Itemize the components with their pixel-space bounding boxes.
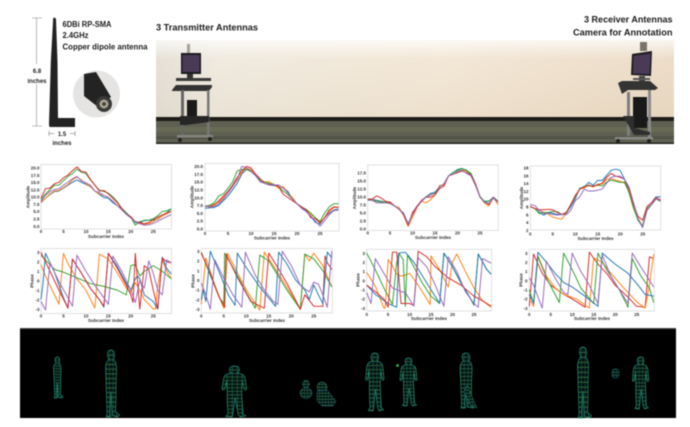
receiver cart — [615, 42, 658, 143]
chart: amplitude 3: Amplitude — [352, 186, 357, 209]
chart: amplitude 2: 2.5 — [197, 219, 203, 224]
chart: phase 2 — [190, 248, 332, 323]
icon: dipole antenna — [49, 18, 75, 127]
chart: amplitude 3: 0 — [366, 230, 369, 236]
chart: amplitude 4: 5 — [552, 232, 555, 236]
chart: amplitude 1: 15 — [106, 229, 111, 234]
chart: amplitude 2: Subcarrier Index — [254, 236, 291, 240]
chart: phase 1 — [30, 248, 172, 323]
chart: phase 4: 10 — [570, 312, 575, 317]
chart: amplitude 1: Amplitude — [26, 185, 30, 208]
chart: phase 2: 2 — [197, 259, 200, 264]
chart: phase 3: -1 — [361, 288, 365, 292]
chart: amplitude 2: 20 — [294, 231, 300, 236]
chart: phase 3: 25 — [471, 312, 477, 317]
chart: amplitude 4: 10 — [573, 232, 578, 236]
chart: phase 1: -3 — [35, 307, 40, 312]
chart: amplitude 2: 10 — [248, 231, 254, 236]
chart: phase 2: 20 — [289, 314, 294, 318]
chart: phase 1: 3 — [37, 250, 40, 255]
chart: amplitude 3: 7.5 — [360, 202, 366, 207]
chart: phase 1: Subcarrier Index — [88, 318, 125, 323]
photo: room with transmitter and receiver carts — [156, 40, 674, 144]
chart: amplitude 4: 12 — [523, 189, 529, 194]
chart: amplitude 4: 15 — [595, 232, 601, 236]
figure 10 — [632, 357, 649, 409]
chart: phase 3: Phase — [356, 273, 360, 287]
chart: amplitude 2: 17.5 — [194, 172, 203, 177]
chart: phase 1: 2 — [37, 260, 40, 264]
chart: phase 3: -2 — [361, 297, 365, 302]
width dimension: 1.5 — [58, 132, 67, 138]
chart: amplitude 1: 0 — [40, 229, 43, 234]
chart: phase 1: 10 — [83, 314, 89, 318]
chart: amplitude 3: 12.5 — [357, 186, 366, 192]
chart: amplitude 2: 20.0 — [194, 164, 203, 169]
chart: amplitude 1: 10.0 — [31, 195, 40, 200]
width dimension: inches — [52, 141, 72, 147]
chart: phase 4: 20 — [613, 312, 618, 317]
chart: amplitude 1: 2.5 — [33, 216, 40, 222]
chart: phase 3: 5 — [387, 312, 390, 317]
chart: amplitude 3: 2.5 — [360, 218, 366, 223]
chart: amplitude 3: 20 — [455, 230, 460, 236]
antenna specification text — [62, 20, 148, 52]
chart: phase 4: -3 — [523, 306, 528, 311]
chart: phase 3 — [356, 249, 492, 321]
antenna specification text: Copper dipole antenna — [62, 42, 148, 52]
chart: amplitude 3: 15 — [432, 230, 438, 236]
chart: amplitude 4 — [519, 166, 661, 241]
chart: phase 3: 15 — [428, 312, 434, 317]
figure 7 — [400, 358, 417, 406]
chart: phase 1: Phase — [30, 274, 34, 288]
chart: phase 3: Subcarrier Index — [411, 316, 448, 321]
transmitter cart — [172, 44, 213, 142]
chart: amplitude 3: 0.0 — [360, 226, 366, 231]
chart: phase 4: -2 — [523, 297, 528, 302]
chart: amplitude 3: Subcarrier Index — [415, 235, 452, 240]
chart: phase 4: 0 — [525, 278, 528, 283]
chart: phase 2: 3 — [197, 249, 200, 254]
chart: amplitude 1: 20.0 — [31, 166, 40, 170]
chart: phase 2: 0 — [197, 278, 200, 283]
chart: amplitude 2 — [190, 164, 339, 240]
chart: phase 2: Subcarrier Index — [249, 318, 286, 323]
chart: phase 1: 0 — [40, 314, 43, 318]
chart: phase 1: 1 — [37, 269, 40, 274]
chart: phase 4: 5 — [549, 312, 552, 317]
figure 5: crouching person — [317, 382, 336, 406]
chart: amplitude 4: 18 — [523, 166, 529, 170]
chart: amplitude 4: 25 — [640, 232, 646, 236]
chart: amplitude 3: 10 — [410, 230, 415, 236]
chart: amplitude 1: 20 — [128, 229, 134, 234]
chart: amplitude 4: 20 — [618, 232, 623, 236]
chart: amplitude 4: 6 — [526, 212, 529, 217]
chart: amplitude 2: 12.5 — [194, 188, 203, 192]
chart: phase 3: 3 — [362, 251, 365, 256]
chart: phase 2: 10 — [244, 314, 249, 318]
chart: phase 1: 25 — [151, 314, 156, 318]
chart: phase 1: -2 — [35, 297, 40, 302]
chart: amplitude 1: Subcarrier Index — [88, 234, 125, 239]
chart: phase 4: Phase — [518, 273, 524, 287]
chart: amplitude 2: 15.0 — [194, 180, 203, 185]
chart: phase 2: 25 — [311, 314, 317, 318]
chart: amplitude 2: 0.0 — [197, 226, 203, 232]
heading: receiver and camera: 3 Receiver Antennas — [584, 14, 672, 26]
chart: phase 1: -1 — [35, 288, 40, 293]
chart: phase 3: 2 — [362, 260, 365, 265]
chart: phase 3: 20 — [450, 312, 455, 317]
chart: amplitude 3: 25 — [477, 230, 483, 236]
ball 2 — [612, 369, 619, 378]
chart: phase 2: -1 — [195, 288, 200, 293]
figure 3 — [222, 366, 247, 417]
chart: amplitude 1: 7.5 — [33, 202, 40, 207]
chart: phase 2: 5 — [223, 314, 226, 318]
chart: phase 4: Subcarrier Index — [574, 316, 611, 321]
chart: amplitude 3: 5.0 — [360, 210, 366, 215]
chart: phase 1: 20 — [128, 314, 134, 318]
icon: connector close-up — [73, 70, 120, 118]
chart: amplitude 4: 16 — [523, 173, 529, 178]
chart: amplitude 4: 0 — [529, 232, 532, 236]
heading: receiver and camera — [573, 14, 673, 38]
chart: phase 1: 5 — [62, 314, 65, 318]
chart: amplitude 2: 0 — [204, 231, 207, 236]
ball 1 — [396, 364, 399, 367]
chart: amplitude 4: 10 — [523, 197, 529, 202]
chart: amplitude 4: 2 — [526, 228, 529, 233]
chart: amplitude 1: 17.5 — [31, 173, 40, 178]
chart: phase 4: 25 — [634, 312, 640, 317]
chart: amplitude 1 — [26, 164, 172, 239]
chart: amplitude 1: 5 — [62, 229, 65, 234]
chart: phase 2: -2 — [195, 297, 200, 302]
chart: phase 2: 0 — [200, 314, 203, 318]
figure 4: crouching person — [300, 380, 312, 398]
chart: phase 4: 1 — [525, 269, 528, 274]
chart: phase 1: 0 — [37, 278, 40, 284]
chart: phase 2: Phase — [190, 274, 196, 288]
chart: phase 4: 0 — [528, 312, 531, 317]
chart: amplitude 4: Subcarrier Index — [577, 236, 614, 241]
chart: amplitude 3: 15.0 — [357, 178, 366, 184]
chart: amplitude 4: Amplitude — [519, 186, 524, 209]
width dimension — [49, 131, 75, 147]
chart: amplitude 2: 5 — [227, 231, 230, 236]
figure 6 — [366, 353, 384, 411]
chart: phase 4: -1 — [523, 288, 528, 292]
figure 2 — [106, 350, 120, 417]
chart: amplitude 3: 5 — [389, 230, 392, 236]
height dimension: 6.8 — [33, 69, 42, 75]
chart: phase 2: -3 — [195, 307, 200, 312]
chart: amplitude 3: 17.5 — [357, 170, 366, 176]
chart: phase 4: 2 — [525, 260, 528, 265]
chart: amplitude 2: 10.0 — [194, 195, 203, 200]
chart: amplitude 1: 10 — [83, 229, 89, 234]
chart: phase 3: 10 — [407, 312, 413, 317]
chart: amplitude 4: 14 — [523, 181, 529, 186]
chart: amplitude 4: 4 — [526, 220, 529, 225]
chart: amplitude 3: 10.0 — [357, 194, 366, 199]
chart: phase 3: 0 — [362, 278, 365, 283]
panel: human mesh annotations on black — [20, 328, 676, 418]
chart: amplitude 1: 0.0 — [33, 224, 40, 229]
chart: phase 3: -3 — [361, 306, 365, 311]
chart: phase 3: 1 — [362, 269, 365, 274]
chart: amplitude 3 — [352, 165, 498, 240]
chart: amplitude 1: 25 — [151, 229, 156, 234]
height dimension: inches — [27, 79, 47, 85]
antenna specification text: 2.4GHz — [62, 31, 89, 40]
chart: amplitude 2: 7.5 — [197, 203, 203, 208]
heading: receiver and camera: Camera for Annotation — [573, 28, 673, 38]
chart: amplitude 4: 8 — [526, 204, 529, 210]
chart: phase 2: 1 — [197, 268, 200, 273]
chart: amplitude 1: 15.0 — [31, 180, 40, 185]
chart: amplitude 2: 5.0 — [197, 211, 203, 216]
chart: phase 1: 15 — [106, 314, 111, 318]
chart: amplitude 2: 25 — [317, 231, 323, 236]
chart: phase 4: 3 — [525, 251, 528, 256]
chart: amplitude 1: 5.0 — [33, 209, 40, 214]
chart: phase 4 — [518, 249, 654, 321]
figure 1 — [54, 357, 63, 398]
chart: phase 2: 15 — [266, 314, 272, 318]
chart: phase 3: 0 — [365, 312, 368, 317]
antenna specification text: 6DBi RP-SMA — [62, 20, 112, 29]
heading: transmitter: 3 Transmitter Antennas — [156, 22, 258, 34]
chart: amplitude 2: 15 — [271, 231, 277, 236]
chart: phase 4: 15 — [591, 312, 597, 317]
height dimension — [27, 18, 47, 126]
figure 8 — [460, 353, 477, 408]
figure 9 — [578, 347, 592, 418]
panel: antenna specification — [27, 18, 148, 147]
chart: amplitude 1: 12.5 — [31, 187, 40, 192]
chart: amplitude 2: Amplitude — [190, 185, 194, 208]
